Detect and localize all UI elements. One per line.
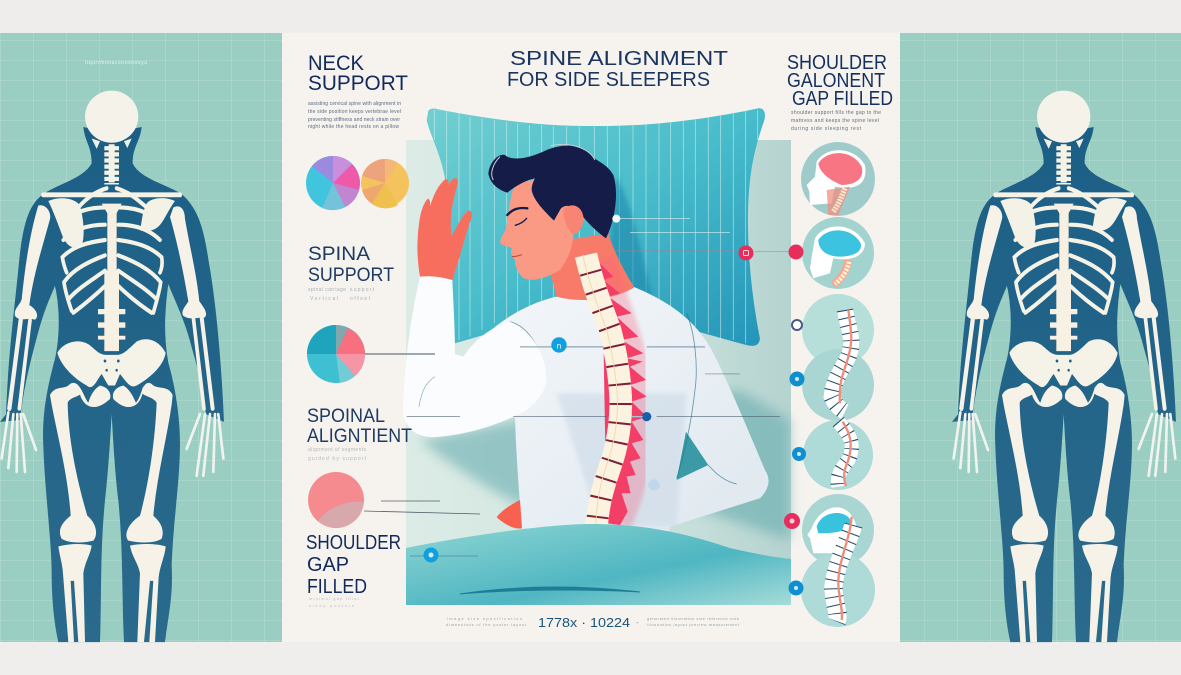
illustration: sleeping man on pillow xyxy=(403,108,793,533)
heading: spoinal alignment xyxy=(307,406,412,447)
text block: spina support xyxy=(308,287,375,302)
blanket fold xyxy=(460,587,640,594)
footer dimensions: generated illustration size reference note xyxy=(647,616,740,621)
blue marker: blanket xyxy=(410,548,478,562)
heading: shoulder galonent gap filled: SHOULDER xyxy=(787,52,887,74)
pie: teal and coral xyxy=(307,325,365,383)
ribs xyxy=(62,188,162,313)
red marker: pillow xyxy=(738,246,754,260)
text block: spina support: offset xyxy=(350,296,371,302)
neck vertebrae xyxy=(90,146,134,184)
text block: right heading: shoulder support fills the gap to the xyxy=(791,110,881,116)
heading: spina support: SPINA xyxy=(308,244,370,265)
text block: spoinal alignment: alignment of segments xyxy=(308,447,366,453)
heading: shoulder gap filled xyxy=(306,532,401,598)
callout lines from coral pie xyxy=(364,501,480,514)
text block: shoulder gap filled: sleep posture xyxy=(309,603,355,608)
white dot xyxy=(612,215,620,223)
heading: neck support xyxy=(308,52,408,95)
blue marker: upper back xyxy=(520,337,705,353)
spine glow xyxy=(600,260,641,523)
text block: spoinal alignment xyxy=(308,447,367,462)
blue marker: upper back: n xyxy=(557,341,561,350)
title: SPINE ALIGNMENT xyxy=(510,48,728,70)
shoulder blades xyxy=(48,198,175,248)
title xyxy=(507,48,728,91)
heading: shoulder galonent gap filled: GALONENT xyxy=(787,70,885,92)
text block: neck support: the side position keeps vertebrae level xyxy=(308,109,401,115)
skeleton figure: right xyxy=(952,91,1176,642)
scene backdrop xyxy=(406,140,791,605)
sacrum holes xyxy=(104,360,120,372)
left-panel faint caption: tiqurrmnoacsnnsnoxyu xyxy=(85,60,147,66)
title: FOR SIDE SLEEPERS xyxy=(507,69,710,91)
hands xyxy=(2,412,223,476)
panel: right teal background xyxy=(900,33,1181,642)
forearm bones xyxy=(9,317,213,409)
shin bones xyxy=(58,544,166,642)
panel: left teal background xyxy=(0,33,282,642)
text block: spina support: support xyxy=(350,287,375,293)
callout tick xyxy=(705,373,740,375)
red spinous processes xyxy=(597,260,647,525)
pillow callout lines xyxy=(618,218,730,233)
blanket xyxy=(406,524,791,605)
gap between arm and torso xyxy=(677,432,708,480)
neck and skin xyxy=(547,233,634,300)
sleeve: folded arm xyxy=(403,276,547,437)
pie: orange xyxy=(361,159,409,208)
heading: spina support: SUPPORT xyxy=(308,265,394,286)
lower red hand peek xyxy=(497,500,522,529)
footer dimensions: illustration layout preview measurement xyxy=(647,622,740,627)
text block: neck support: night while the head rests on a pillow xyxy=(308,124,399,130)
icon: spine segments upper xyxy=(832,310,851,412)
text block: right heading: during side sleeping rest xyxy=(791,126,862,132)
callout line across mid back xyxy=(407,416,780,418)
footer dimensions: image size specification xyxy=(447,616,522,621)
footer dimensions: - xyxy=(636,618,639,627)
text block: neck support: assisting cervical spine with alignment in xyxy=(308,101,401,107)
backdrop shadow under arm xyxy=(420,390,790,540)
icon: spine segments middle xyxy=(838,422,852,487)
footer dimensions xyxy=(446,615,740,630)
top band xyxy=(0,0,1181,33)
heading: shoulder gap filled: GAP xyxy=(307,554,349,576)
sternum xyxy=(102,204,122,274)
collar bones xyxy=(43,188,180,201)
heading: spoinal alignment: SPOINAL xyxy=(307,406,385,427)
text block: neck support xyxy=(308,101,401,130)
lumbar spine xyxy=(90,271,134,351)
text block: shoulder gap filled: minimal gap filler xyxy=(309,596,360,601)
icon: head anatomy lower with spine xyxy=(807,507,857,622)
neck shadow on pillow xyxy=(607,177,653,300)
text block: spina support: spinal carriage xyxy=(308,287,346,293)
shoulder seam xyxy=(510,313,737,484)
closed eye xyxy=(515,218,527,225)
jaw tips xyxy=(92,139,132,149)
markers: right column xyxy=(784,244,806,596)
pelvis xyxy=(57,339,166,387)
right column circles xyxy=(801,142,875,627)
heading: neck support: NECK xyxy=(308,52,364,75)
heading: shoulder gap filled: FILLED xyxy=(307,576,367,598)
faint dot xyxy=(648,479,660,491)
upper arm bones xyxy=(15,205,206,320)
heading: shoulder gap filled: SHOULDER xyxy=(306,532,401,554)
icon: head anatomy blue xyxy=(810,226,865,285)
hand xyxy=(417,178,472,280)
blue marker: spine xyxy=(632,412,651,421)
sleeve fold xyxy=(419,377,435,407)
callout line from pie xyxy=(365,353,435,355)
footer dimensions: dimensions of the poster layout xyxy=(446,622,527,627)
text block: neck support: preventing stiffness and neck strain over xyxy=(308,117,400,123)
torso shading xyxy=(557,393,687,527)
heading: shoulder galonent gap filled xyxy=(787,52,893,110)
eyebrow xyxy=(507,208,527,215)
heading: neck support: SUPPORT xyxy=(308,72,408,95)
hair highlight xyxy=(492,144,595,180)
heading: spoinal alignment: ALIGNTIENT xyxy=(307,426,412,447)
callout line: red xyxy=(613,250,793,253)
face xyxy=(500,180,587,280)
body silhouette xyxy=(0,127,224,642)
heading: shoulder galonent gap filled: GAP FILLED xyxy=(792,88,893,110)
text block: spoinal alignment: guided by support xyxy=(308,456,367,462)
pie: multicolour xyxy=(306,156,360,210)
mouth xyxy=(512,255,522,257)
femur bones xyxy=(50,383,173,542)
skeleton figure: left xyxy=(0,91,224,642)
text block: spina support: Vertical xyxy=(310,296,338,302)
text block: right heading: mattress and keeps the spine level xyxy=(791,118,879,124)
panel: center sheet xyxy=(282,33,900,642)
ear xyxy=(563,205,583,234)
text block: shoulder gap filled xyxy=(309,596,360,608)
pillow xyxy=(427,108,765,346)
shirt: torso and right arm xyxy=(463,287,769,533)
text block: right heading xyxy=(791,110,881,132)
bottom band xyxy=(0,642,1181,675)
hair xyxy=(488,146,616,238)
heading: spina support xyxy=(308,244,394,286)
pillow stripes xyxy=(434,110,758,343)
skull xyxy=(85,91,138,143)
pie: coral xyxy=(308,472,364,528)
icon: head anatomy red xyxy=(807,150,865,215)
hip rings xyxy=(78,386,143,407)
footer dimensions: 1778x · 10224 xyxy=(538,615,630,630)
vertebrae cream blocks xyxy=(583,255,621,525)
